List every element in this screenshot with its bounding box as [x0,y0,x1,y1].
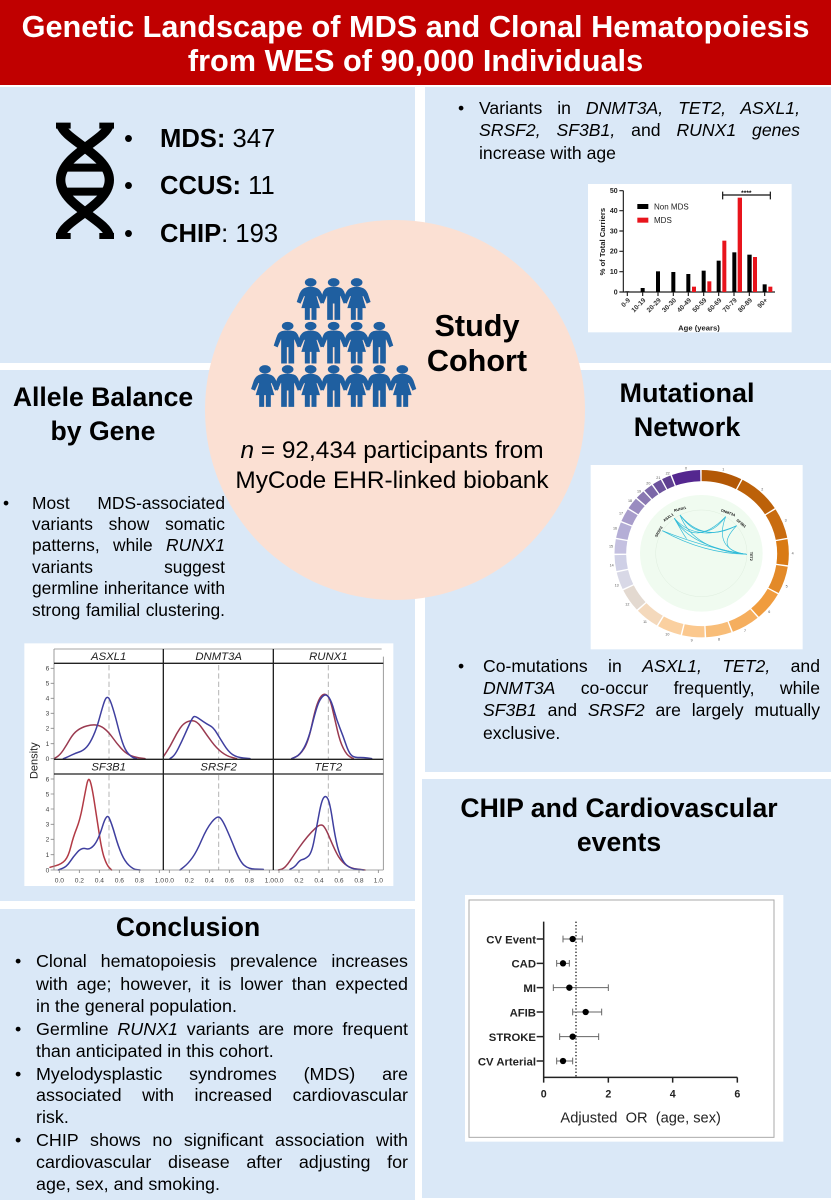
chart: circos mutational network: 8 [718,637,720,641]
chart: forest plot of adjusted odds ratios: MI [523,983,536,995]
text: somatic and germline patterns [3,493,225,620]
chart: circos mutational network: 21 [656,476,660,480]
bar chart: carriers by age: 40-49 [676,297,693,314]
chart: allele balance density by gene: SRSF2 [200,762,238,774]
panel: CHIP and cardiovascular events [422,779,831,1198]
chart: forest plot of adjusted odds ratios: AFIB [510,1007,536,1019]
panel: allele balance [0,370,415,901]
bar chart: carriers by age: 50 [610,188,618,195]
chart: circos mutational network: SF3B1 [735,518,747,529]
chart: circos mutational network: 4 [792,552,794,556]
text: conclusion points: associated with increased cardiovascular [36,1085,408,1105]
list: variant counts: CHIP: 193 [160,220,278,248]
list: variant counts: • [124,172,133,200]
heading: CHIP and cardiovascular events: events [577,827,661,857]
chart: allele balance density by gene: DNMT3A [195,651,242,663]
chart: forest plot of adjusted odds ratios: 0 [541,1089,547,1101]
chart: allele balance density by gene: 1 [46,852,50,859]
chart: circos mutational network: 2 [761,488,763,492]
bar chart: carriers by age: 70-79 [722,297,739,314]
chart: circos mutational network: 14 [610,563,614,567]
text: conclusion points: age, sex, and smoking. [36,1174,220,1194]
text: conclusion points: • [15,1019,21,1039]
chart: circos mutational network [590,465,803,650]
chart: circos mutational network: 3 [785,518,787,522]
chart: allele balance density by gene: 1.0 [265,877,274,884]
text: somatic and germline patterns: variants suggest [32,557,225,577]
bar chart: carriers by age: 30 [610,228,618,235]
heading: study cohort: Study [434,309,519,343]
chart: allele balance density by gene: 0 [46,867,50,874]
chart: allele balance density by gene: 0.8 [245,877,254,884]
list: variant counts [124,125,278,248]
chart: forest plot of adjusted odds ratios: 6 [734,1089,740,1101]
chart: circos mutational network: 18 [628,499,632,503]
bar chart: carriers by age: 20-29 [646,297,663,314]
bar chart: carriers by age: **** [741,190,752,197]
text: co-mutation patterns: exclusive. [483,723,560,743]
bar chart: carriers by age: 40 [610,208,618,215]
text: conclusion points: Clonal hematopoiesis prevalence increases [36,951,408,971]
text: somatic and germline patterns: patterns, while RUNX1 [32,535,225,555]
chart: allele balance density by gene: 2 [46,726,50,733]
heading: mutational network: Mutational [620,378,754,408]
chart: forest plot of adjusted odds ratios: 4 [670,1089,676,1101]
text: conclusion points: • [15,951,21,971]
text: co-mutation patterns [458,656,820,743]
bar chart: carriers by age: 90+ [756,297,769,310]
bar chart: carriers by age: Age (years) [678,323,720,332]
text: somatic and germline patterns: Most MDS-associated [32,493,225,513]
bar chart: carriers by age: 60-69 [706,297,724,314]
chart: circos mutational network: 6 [768,610,770,614]
heading: mutational network [620,378,754,442]
chart: allele balance density by gene: 5 [46,681,50,688]
text: conclusion points: cardiovascular disease after adjusting for [36,1152,408,1172]
chart: circos mutational network: 10 [665,632,669,636]
chart: circos mutational network: 19 [637,489,641,493]
text: co-mutation patterns: SF3B1 and SRSF2 are largely mutually [483,700,820,720]
list: variant counts: MDS: 347 [160,125,275,153]
chart: circos mutational network: 16 [613,527,617,531]
chart: circos mutational network: 9 [691,638,693,642]
chart: circos mutational network: 17 [619,512,623,516]
text: co-mutation patterns: DNMT3A co-occur frequently, while [483,678,820,698]
chart: allele balance density by gene: 0.2 [294,877,304,884]
chart: allele balance density by gene: 0.6 [115,877,124,884]
chart: allele balance density by gene: 3 [46,711,50,718]
chart: allele balance density by gene: 1.0 [374,877,383,884]
chart: allele balance density by gene: 0.8 [354,877,364,884]
chart: allele balance density by gene: 4 [46,696,50,703]
chart: allele balance density by gene: 0.2 [185,877,194,884]
text: conclusion points: CHIP shows no significant association with [36,1130,408,1150]
chart: allele balance density by gene: SF3B1 [91,762,126,774]
bar chart: carriers by age: 0 [614,289,618,296]
chart: forest plot of adjusted odds ratios [465,895,784,1142]
chart: circos mutational network: 20 [646,482,650,486]
chart: circos mutational network: 15 [609,544,613,548]
chart: allele balance density by gene: 1 [46,741,50,748]
text: conclusion points: • [15,1064,21,1084]
chart: allele balance density by gene: 0.0 [55,877,64,884]
chart: circos mutational network: 5 [786,584,788,588]
chart: forest plot of adjusted odds ratios: CV Arterial [478,1056,536,1068]
bar chart: carriers by age: 50-59 [691,297,709,314]
icon: DNA helix [56,122,114,239]
bar chart: carriers by age: MDS [654,216,672,225]
chart: circos mutational network: DNMT3A [720,508,736,518]
panel: age trend [425,87,831,363]
heading: allele balance by gene: Allele Balance [13,382,193,412]
text: conclusion points: Myelodysplastic syndromes (MDS) are [36,1064,408,1084]
text: variants increase with age: Variants in DNMT3A, TET2, ASXL1, [479,98,800,118]
heading: study cohort: Cohort [427,344,527,378]
heading: CHIP and cardiovascular events: CHIP and Cardiovascular [460,793,778,823]
bar chart: carriers by age: Non MDS [654,202,689,211]
chart: allele balance density by gene: 0.4 [95,877,104,884]
chart: forest plot of adjusted odds ratios: CV Event [486,934,536,946]
text: conclusion points: with age; however, it is lower than expected [36,974,408,994]
bar chart: carriers by age: 80-89 [737,297,754,314]
chart: allele balance density by gene: 3 [46,822,50,829]
bar chart: carriers by age: 30-30 [661,297,678,314]
chart: allele balance density by gene: 5 [46,791,50,798]
chart: forest plot of adjusted odds ratios: CAD [511,959,536,971]
chart: allele balance density by gene: 6 [46,666,50,673]
chart: forest plot of adjusted odds ratios: 2 [605,1089,611,1101]
heading: conclusion: Conclusion [116,912,260,942]
chart: allele balance density by gene: RUNX1 [309,651,348,663]
chart: circos mutational network: 22 [666,472,670,476]
bar chart: carriers by age: 0-9 [620,297,632,309]
text: cohort description: n = 92,434 participants from [240,437,544,464]
chart: allele balance density by gene: Density [29,742,41,779]
heading: mutational network: Network [634,412,740,442]
chart: circos mutational network: X [685,467,688,471]
text: somatic and germline patterns: variants show somatic [32,514,225,534]
text: conclusion points: risk. [36,1107,69,1127]
list: variant counts: • [124,220,133,248]
chart: circos mutational network: RUNX1 [674,506,687,513]
chart: allele balance density by gene: 0.8 [135,877,144,884]
text: conclusion points [15,951,408,1194]
chart: allele balance density by gene: 0.0 [274,877,284,884]
chart: allele balance density by gene: 0.0 [165,877,174,884]
chart: allele balance density by gene: TET2 [314,762,343,774]
chart: forest plot of adjusted odds ratios: STROKE [489,1032,536,1044]
chart: forest plot of adjusted odds ratios: Adjusted OR (age, sex) [560,1111,721,1127]
chart: allele balance density by gene [24,643,394,886]
chart: allele balance density by gene: 0.2 [75,877,84,884]
text: conclusion points: than anticipated in this cohort. [36,1041,274,1061]
panel: conclusion [0,909,415,1200]
chart: allele balance density by gene: 0.4 [314,877,324,884]
study cohort circle [205,220,585,600]
text: co-mutation patterns: Co-mutations in ASXL1, TET2, and [483,656,820,676]
title banner [0,0,831,85]
text: conclusion points: • [15,1130,21,1150]
chart: circos mutational network: ASXL1 [663,513,675,523]
list: variant counts: CCUS: 11 [160,172,275,200]
heading: study cohort [427,309,527,378]
heading: CHIP and cardiovascular events [460,793,778,857]
bar chart: carriers by age [588,184,792,332]
text: conclusion points: in the general population. [36,996,237,1016]
text: somatic and germline patterns: • [3,493,9,513]
chart: allele balance density by gene: 4 [46,806,50,813]
text: somatic and germline patterns: strong familial clustering. [32,600,225,620]
bar chart: carriers by age: % of Total Carriers [598,208,607,275]
chart: allele balance density by gene: 0.4 [205,877,214,884]
chart: allele balance density by gene: 1.0 [155,877,164,884]
chart: allele balance density by gene: 0 [46,756,50,763]
title banner: from WES of 90,000 Individuals [188,43,643,78]
bar chart: carriers by age: 10 [610,269,618,276]
text: cohort description: MyCode EHR-linked biobank [235,467,549,494]
chart: allele balance density by gene: 0.6 [225,877,234,884]
list: variant counts: • [124,125,133,153]
icon: group of people [251,278,416,407]
text: variants increase with age: SRSF2, SF3B1, and RUNX1 genes [479,120,800,140]
chart: allele balance density by gene: 0.6 [334,877,344,884]
chart: allele balance density by gene: ASXL1 [90,651,126,663]
chart: circos mutational network: TET2 [749,552,753,561]
chart: circos mutational network: 11 [643,620,647,624]
chart: circos mutational network: 13 [615,583,619,587]
bar chart: carriers by age: 10-19 [630,297,648,314]
heading: allele balance by gene: by Gene [51,416,155,446]
title banner: Genetic Landscape of MDS and Clonal Hematopoiesis [22,9,809,44]
bar chart: carriers by age: 20 [610,249,618,256]
chart: allele balance density by gene: 2 [46,837,50,844]
text: variants increase with age: increase with age [479,143,616,163]
text: somatic and germline patterns: germline inheritance with [32,578,225,598]
chart: allele balance density by gene: 6 [46,776,50,783]
chart: circos mutational network: 12 [625,603,629,607]
heading: allele balance by gene [13,382,193,446]
chart: circos mutational network: 7 [744,629,746,633]
text: cohort description [235,437,549,494]
text: co-mutation patterns: • [458,656,464,676]
panel: mutational network [425,370,831,772]
text: variants increase with age [458,98,800,163]
panel: variant counts [0,87,415,363]
text: variants increase with age: • [458,98,464,118]
chart: circos mutational network: SRSF2 [654,526,664,538]
text: conclusion points: Germline RUNX1 variants are more frequent [36,1019,408,1039]
chart: circos mutational network: 1 [722,468,724,472]
